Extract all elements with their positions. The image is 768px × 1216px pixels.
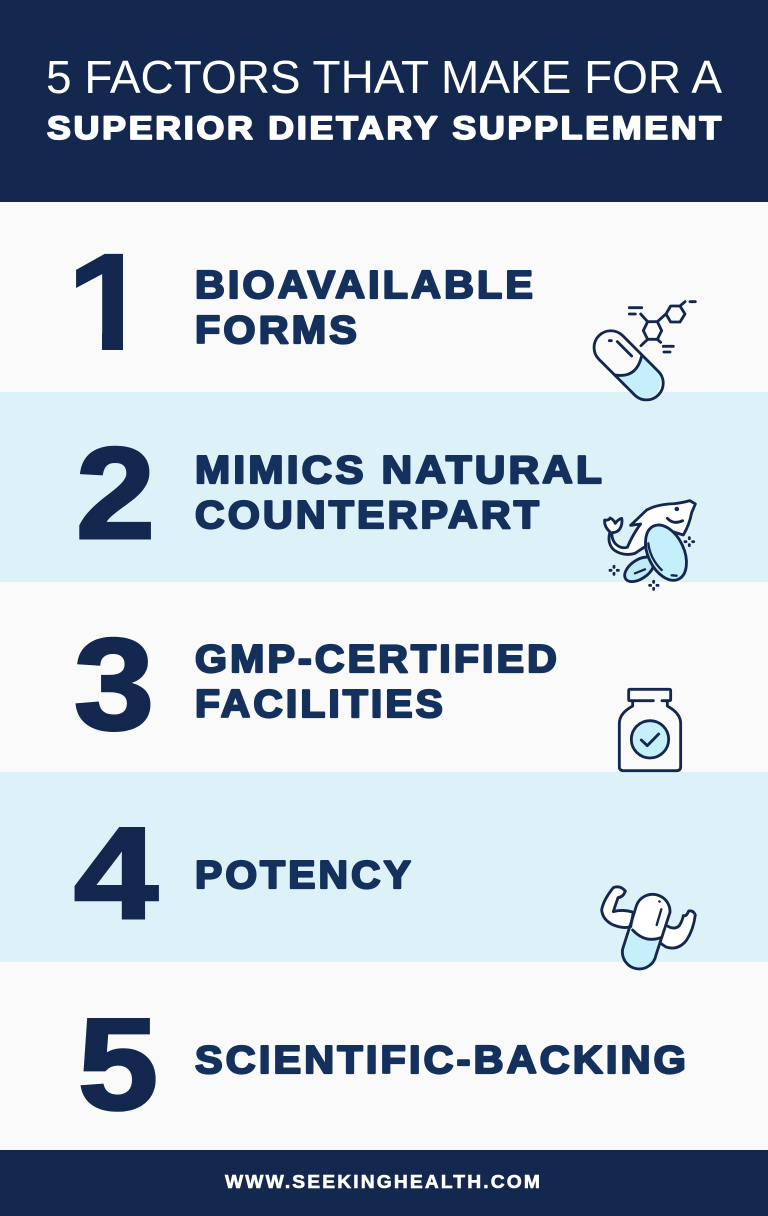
- title line 1: 5 FACTORS THAT MAKE FOR A: [46, 51, 722, 103]
- number 3: 3: [74, 611, 154, 757]
- panel: factor 1: [76, 254, 697, 402]
- panel: factor 4: [0, 772, 768, 969]
- number 1: 1: [67, 226, 155, 378]
- heading: gmp-certified facilities: GMP-CERTIFIED: [195, 638, 560, 681]
- number 5: 5: [78, 991, 158, 1137]
- panel: factor 5: [0, 962, 768, 1150]
- header panel: [0, 0, 768, 202]
- heading: gmp-certified facilities: [195, 638, 560, 726]
- heading: mimics natural counterpart: COUNTERPART: [195, 494, 542, 537]
- heading: bioavailable forms: [195, 264, 536, 352]
- footer panel: [0, 1150, 768, 1216]
- heading: potency: POTENCY: [195, 854, 414, 897]
- heading: mimics natural counterpart: [195, 449, 605, 537]
- heading: scientific-backing: SCIENTIFIC-BACKING: [195, 1039, 689, 1082]
- panel: factor 2: [0, 392, 768, 589]
- panel: factor 3: [0, 582, 768, 772]
- number 4: 4: [74, 800, 158, 946]
- number 2: 2: [76, 420, 155, 566]
- icon: fish and softgels: [605, 501, 695, 589]
- heading: bioavailable forms: FORMS: [195, 309, 360, 352]
- heading: mimics natural counterpart: MIMICS NATURAL: [195, 449, 605, 492]
- footer url: WWW.SEEKINGHEALTH.COM: [225, 1172, 542, 1192]
- title line 2: SUPERIOR DIETARY SUPPLEMENT: [47, 110, 724, 146]
- heading: gmp-certified facilities: FACILITIES: [195, 683, 446, 726]
- icon: supplement bottle with check: [619, 689, 681, 771]
- heading: bioavailable forms: BIOAVAILABLE: [195, 264, 536, 307]
- icon: muscular capsule: [602, 887, 695, 969]
- icon: capsule and molecule: [594, 302, 695, 400]
